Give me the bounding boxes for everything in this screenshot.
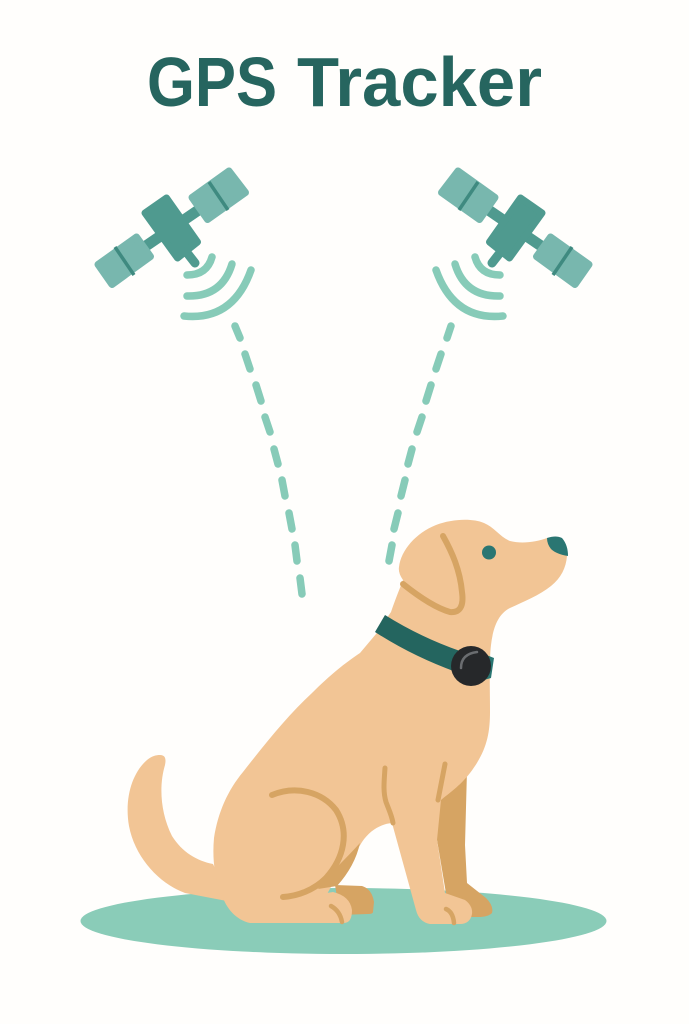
title: GPS <box>147 43 277 121</box>
far front leg <box>437 770 492 917</box>
left dashed signal path <box>235 326 302 594</box>
dog body and head <box>213 520 567 924</box>
satellite body <box>490 198 542 258</box>
collar <box>375 615 460 672</box>
left solar panel <box>98 237 150 284</box>
thigh contour <box>272 790 344 897</box>
far hind paw <box>335 885 374 915</box>
chest contour left <box>384 768 393 823</box>
chest contour right <box>438 764 445 800</box>
satellite body <box>145 198 198 258</box>
signal waves <box>436 257 503 316</box>
eye <box>482 546 496 560</box>
nose <box>547 536 568 556</box>
outer solar panel <box>536 237 589 284</box>
right solar panel <box>192 171 246 220</box>
hind toe line <box>331 906 342 922</box>
upper solar panel <box>442 171 495 220</box>
satellite antenna <box>188 254 195 263</box>
signal waves <box>184 257 251 316</box>
collar end <box>484 654 494 680</box>
left panel divider <box>115 247 134 275</box>
satellite connector arm <box>140 209 200 250</box>
right panel divider <box>209 182 228 210</box>
ground ellipse <box>80 888 606 954</box>
near hind paw <box>290 892 352 923</box>
title: Tracker <box>297 43 542 121</box>
upper panel divider <box>459 182 478 210</box>
front toe line <box>446 909 454 923</box>
device highlight <box>461 652 477 668</box>
outer panel divider <box>553 247 572 275</box>
dog tail <box>128 755 232 902</box>
title <box>147 43 542 121</box>
satellite connector arm <box>487 209 547 250</box>
icon: left satellite with signal waves <box>98 171 251 316</box>
dog illustration <box>128 520 568 924</box>
right dashed signal path <box>389 326 451 561</box>
far hind leg shadow wedge <box>318 843 360 889</box>
ear outline <box>403 536 462 612</box>
GPS tracker device <box>451 646 491 686</box>
icon: right satellite with signal waves <box>436 171 589 316</box>
satellite antenna <box>492 254 499 263</box>
